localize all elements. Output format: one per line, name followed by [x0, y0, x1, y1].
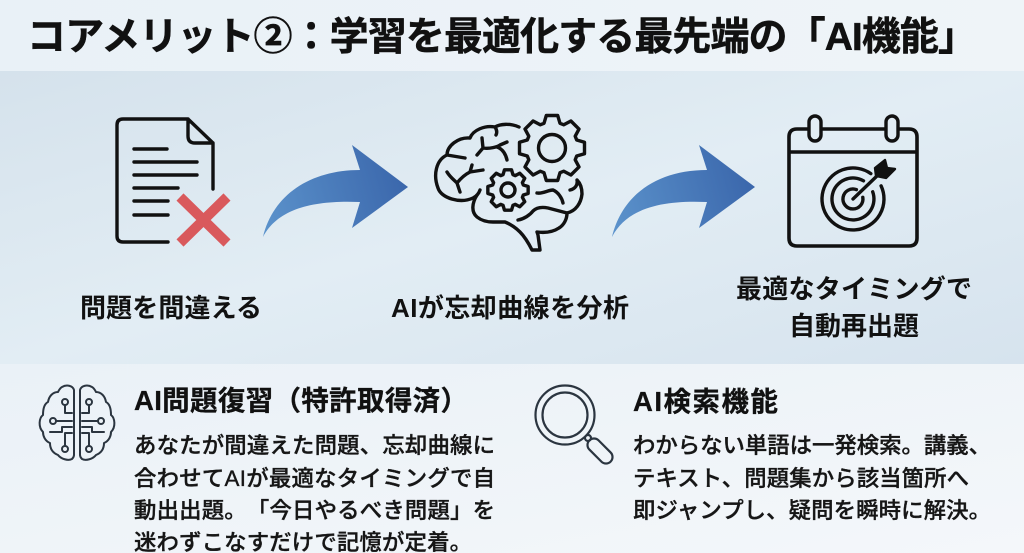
small gear	[488, 170, 528, 210]
text: AI review body: 動出出題。「今日やるべき問題」を	[134, 498, 495, 523]
label: step 1: 問題を間違える	[80, 293, 262, 323]
icon: calendar with target	[789, 116, 917, 246]
text: AI review body: 合わせてAIが最適なタイミングで自	[134, 466, 495, 491]
large gear	[520, 116, 584, 180]
text: AI search body: テキスト、問題集から該当箇所へ	[633, 466, 969, 491]
icon: magnifying glass	[536, 386, 615, 466]
text: AI review body: あなたが間違えた問題、忘却曲線に	[134, 433, 495, 458]
arrow 2	[612, 145, 755, 237]
icon: AI circuit brain	[40, 386, 114, 460]
icon: brain with gears	[436, 116, 584, 250]
large gear hub	[538, 134, 566, 162]
text: AI review body	[134, 433, 495, 553]
heading: AI review: AI問題復習（特許取得済）	[134, 385, 468, 416]
label: step 2: AIが忘却曲線を分析	[391, 293, 629, 323]
text: AI search body	[633, 433, 991, 523]
icon: document with red cross	[117, 119, 227, 243]
arrow 1	[263, 145, 408, 237]
process panel background	[0, 71, 1024, 364]
small gear hub	[501, 183, 515, 197]
title: コアメリット②：学習を最適化する最先端の「AI機能」	[27, 16, 977, 59]
text: AI search body: 即ジャンプし、疑問を瞬時に解決。	[633, 498, 991, 523]
heading: AI search: AI検索機能	[633, 386, 778, 417]
title band	[0, 0, 1024, 71]
label: step 3	[736, 274, 972, 341]
text: AI search body: わからない単語は一発検索。講義、	[633, 433, 991, 458]
label: step 3: 自動再出題	[789, 311, 919, 341]
features panel background	[0, 364, 1024, 553]
label: step 3: 最適なタイミングで	[736, 274, 972, 304]
